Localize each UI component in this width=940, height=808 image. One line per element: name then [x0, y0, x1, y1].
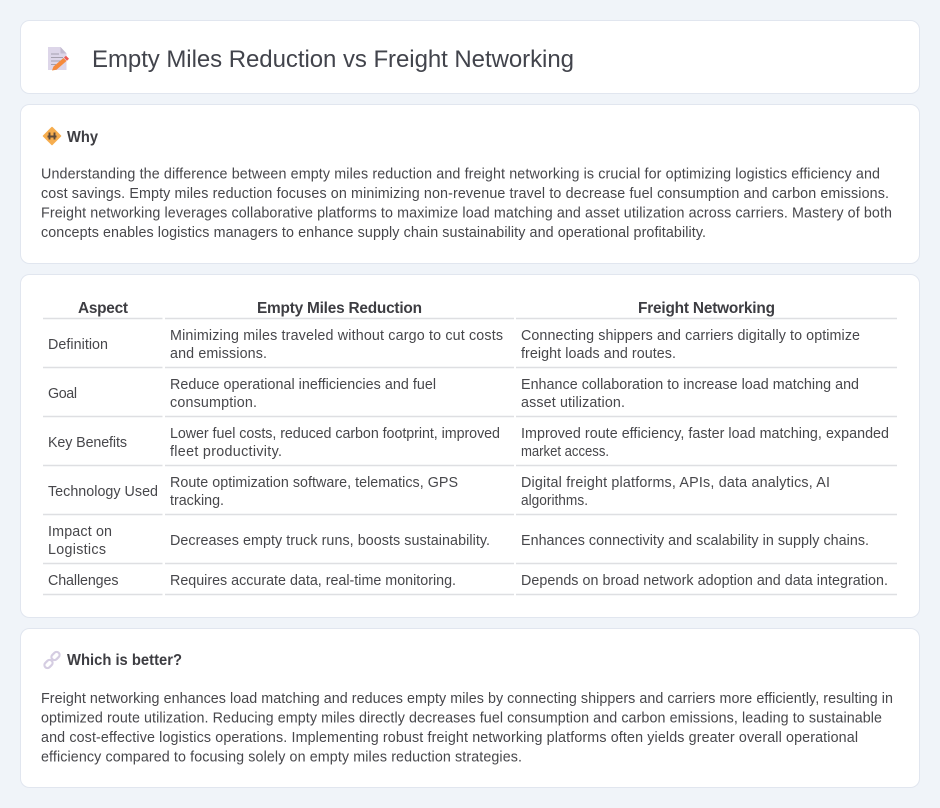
panel: comparison table — [20, 274, 920, 618]
text block: why paragraph — [41, 166, 892, 241]
row: technology used: algorithms. — [521, 493, 588, 509]
row: key benefits: market access. — [521, 444, 609, 460]
row: technology used: Route optimization software, telematics, GPS — [170, 475, 458, 491]
row: definition: Minimizing miles traveled without cargo to cut costs — [170, 328, 503, 344]
row: goal: consumption. — [170, 395, 257, 411]
row: challenges: Requires accurate data, real-time monitoring. — [170, 573, 456, 589]
table header row: Freight Networking — [638, 300, 775, 317]
heading: why: Why — [67, 129, 98, 146]
text block: which is better paragraph — [41, 691, 893, 766]
row: definition: freight loads and routes. — [521, 346, 676, 362]
heading: which is better: Which is better? — [67, 652, 182, 669]
row: impact on logistics: Enhances connectivity and scalability in supply chains. — [521, 533, 869, 549]
panel: why — [20, 104, 920, 264]
row: technology used: Technology Used — [48, 484, 158, 500]
row: technology used: tracking. — [170, 493, 224, 509]
table header row: Aspect — [78, 300, 128, 317]
table header row — [78, 300, 775, 317]
row: technology used — [48, 475, 830, 509]
row: goal: Enhance collaboration to increase load matching and — [521, 377, 859, 393]
panel: which is better — [20, 628, 920, 788]
row: goal: Goal — [48, 386, 77, 402]
row: key benefits: Key Benefits — [48, 435, 127, 451]
row: key benefits — [48, 426, 889, 460]
title: Empty Miles Reduction vs Freight Networking — [92, 46, 574, 73]
row: impact on logistics: Impact on — [48, 524, 112, 540]
row: impact on logistics — [48, 524, 869, 558]
row: challenges — [48, 573, 888, 589]
text block: which is better paragraph: and cost-effective logistics operations. Implementing robust freight networking platforms often yields greater overall operational — [41, 730, 858, 746]
row: key benefits: Improved route efficiency, faster load matching, expanded — [521, 426, 889, 442]
row: goal: asset utilization. — [521, 395, 625, 411]
text block: why paragraph: cost savings. Empty miles reduction focuses on minimizing non-revenue travel to decrease fuel consumption and carbon emissions. — [41, 186, 889, 202]
row: key benefits: fleet productivity. — [170, 444, 282, 460]
row: goal: Reduce operational inefficiencies and fuel — [170, 377, 436, 393]
text block: which is better paragraph: Freight networking enhances load matching and reduces empty miles by connecting shippers and carriers more efficiently, resulting in — [41, 691, 893, 707]
text block: why paragraph: concepts enables logistics managers to enhance supply chain sustainability and operational profitability. — [41, 225, 706, 241]
row: definition — [48, 328, 860, 362]
row: impact on logistics: Logistics — [48, 542, 106, 558]
table header row: Empty Miles Reduction — [257, 300, 422, 317]
text block: why paragraph: Freight networking leverages collaborative platforms to maximize load matching and asset utilization across carriers. Mastery of both — [41, 206, 892, 222]
row: impact on logistics: Decreases empty truck runs, boosts sustainability. — [170, 533, 490, 549]
row: definition: Connecting shippers and carriers digitally to optimize — [521, 328, 860, 344]
panel: title header — [20, 20, 920, 94]
row: challenges: Depends on broad network adoption and data integration. — [521, 573, 888, 589]
text block: which is better paragraph: optimized route utilization. Reducing empty miles directly decreases fuel consumption and carbon emissions, leading to sustainable — [41, 710, 882, 726]
row: technology used: Digital freight platforms, APIs, data analytics, AI — [521, 475, 830, 491]
text block: why paragraph: Understanding the difference between empty miles reduction and freight networking is crucial for optimizing logistics efficiency and — [41, 166, 880, 182]
icon: chain link — [43, 651, 61, 669]
row: definition: and emissions. — [170, 346, 267, 362]
icon: orange diamond sign — [44, 128, 60, 144]
row: goal — [48, 377, 859, 411]
icon: document with pencil — [48, 47, 69, 70]
text block: which is better paragraph: efficiency compared to focusing solely on empty miles reduction strategies. — [41, 750, 522, 766]
row: challenges: Challenges — [48, 573, 118, 589]
row: definition: Definition — [48, 337, 108, 353]
row: key benefits: Lower fuel costs, reduced carbon footprint, improved — [170, 426, 500, 442]
